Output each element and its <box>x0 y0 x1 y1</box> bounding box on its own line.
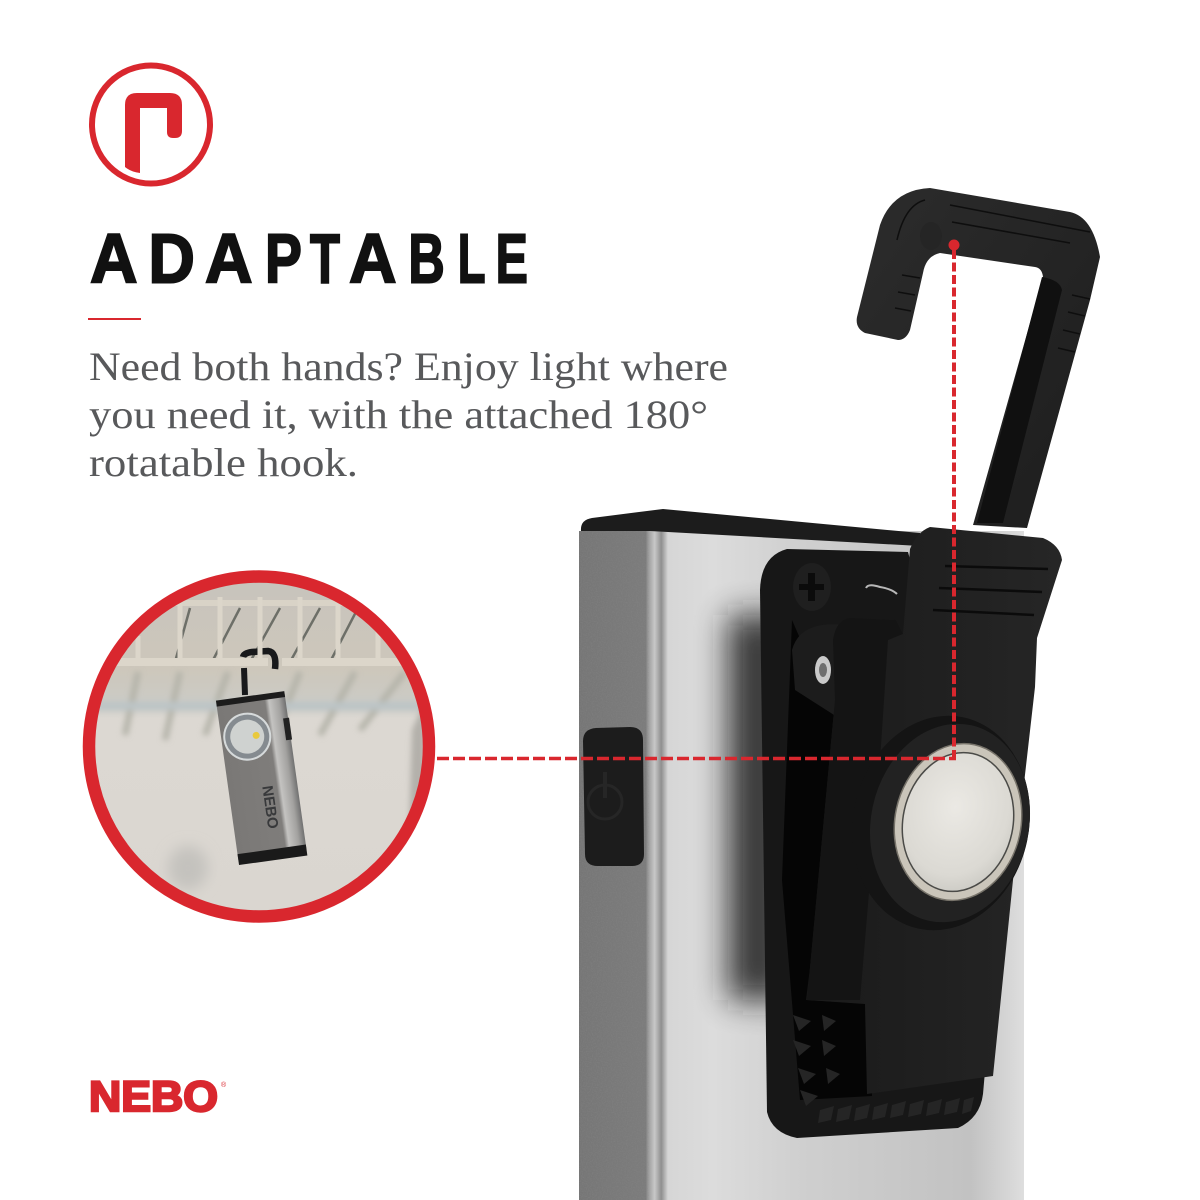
clip back plate <box>760 549 1000 1138</box>
clip lever and front plate <box>807 527 1062 1094</box>
miniature flashlight <box>216 691 308 865</box>
flashlight body <box>579 509 1024 1200</box>
screw: top <box>793 563 831 611</box>
divider accent <box>88 318 141 320</box>
heading: L <box>458 220 486 298</box>
wire shelf <box>116 597 402 696</box>
heading: B <box>408 219 445 297</box>
circular inset: light hanging from wire shelf <box>83 570 435 923</box>
heading: P <box>265 220 302 298</box>
screw: silver <box>792 624 845 722</box>
product: flashlight with hook and clip <box>579 188 1100 1200</box>
logo: NEBO: ® <box>221 1081 227 1089</box>
body text: rotatable hook. <box>89 440 358 485</box>
photo background <box>95 582 420 910</box>
heading: D <box>148 220 195 298</box>
hook <box>857 188 1100 528</box>
heading: A <box>90 221 138 298</box>
magnet <box>832 699 1050 947</box>
heading: A <box>349 221 397 298</box>
heading <box>90 219 528 298</box>
logo: NEBO: NEBO <box>89 1073 218 1121</box>
callout: dashed leader lines <box>437 240 960 759</box>
icon: hook badge <box>92 66 210 184</box>
body text: Need both hands? Enjoy light where <box>89 344 728 389</box>
body text <box>89 344 728 485</box>
heading: A <box>205 221 253 298</box>
teeth <box>793 1015 974 1123</box>
heading: E <box>496 220 528 298</box>
power button <box>583 727 644 866</box>
body text: you need it, with the attached 180° <box>89 392 708 437</box>
heading: T <box>310 219 340 298</box>
miniature flashlight: NEBO <box>258 785 281 830</box>
spring <box>866 585 897 594</box>
